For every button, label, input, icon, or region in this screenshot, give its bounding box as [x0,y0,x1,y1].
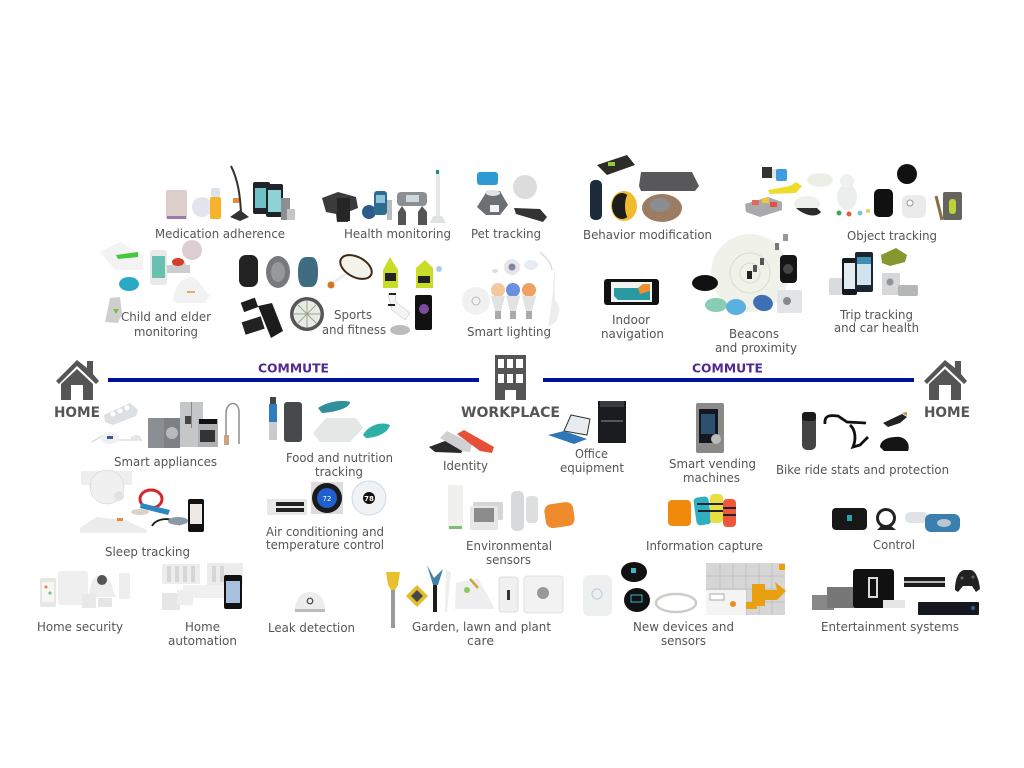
label: indoor navigation: navigation [601,326,664,341]
icon: food devices [269,397,390,442]
icon: pet devices [477,172,547,222]
heading: workplace: WORKPLACE [461,405,560,421]
label: environmental sensors: sensors [486,552,531,567]
icon: identity wristbands [429,430,494,453]
label: new devices and sensors [633,619,734,648]
label: medication adherence: Medication adherence [155,226,285,241]
label: trip tracking and car health [834,307,919,335]
panel: leak detection [268,592,355,635]
icon: sports devices [239,250,442,338]
label: entertainment systems: Entertainment systems [821,619,959,634]
label: child and elder monitoring: Child and elder [121,309,212,324]
icon: workplace building [495,355,526,400]
label: garden, lawn and plant care: Garden, lawn and plant [412,619,551,634]
icon: entertainment devices [812,569,980,615]
label: indoor navigation [601,312,664,341]
label: garden, lawn and plant care [412,619,551,648]
label: leak detection: Leak detection [268,620,355,635]
label: home automation: automation [168,633,237,648]
icon: car devices [829,248,918,296]
heading: commute left: COMMUTE [258,360,329,376]
panel: smart lighting [462,252,559,339]
icon: bike devices [802,412,909,451]
label: office equipment: Office [575,446,608,461]
label: trip tracking and car health: and car health [834,320,919,335]
label: smart appliances: Smart appliances [114,454,217,469]
icon: tracking tags [745,164,962,220]
icon: new devices and map [583,562,786,616]
heading: commute right: COMMUTE [692,360,763,376]
label: home automation: Home [185,619,220,634]
icon: capture tags [668,494,736,527]
label: child and elder monitoring: monitoring [134,324,198,339]
label: child and elder monitoring [121,309,212,339]
panel: sleep tracking [80,470,204,559]
panel: smart appliances [92,402,239,469]
panel: sports and fitness [239,250,442,338]
label: office equipment: equipment [560,460,624,475]
heading: home right: HOME [924,405,970,421]
panel: indoor navigation [601,279,664,341]
label: food and nutrition tracking: Food and nutrition [286,450,393,465]
panel: office equipment [548,401,626,475]
icon: environmental sensors [448,485,576,531]
label: bike ride stats and protection: Bike ride stats and protection [776,462,949,477]
label: environmental sensors [466,538,552,567]
icon: appliances [92,402,239,448]
label: control: Control [873,537,915,552]
panel: garden, lawn and plant care [386,565,563,648]
icon: thermostats: 78 [364,495,374,503]
panel: entertainment systems [812,569,980,634]
icon: thermostats: 72 [323,495,331,503]
icon: control devices [832,508,960,532]
icon: garden sensors [386,565,563,628]
label: new devices and sensors: sensors [661,633,706,648]
icon: home right [924,360,967,400]
icon: home left [56,360,99,400]
panel: health monitoring [322,170,451,241]
label: beacons and proximity [715,326,798,355]
panel: identity [429,430,494,473]
label: food and nutrition tracking [286,450,393,479]
icon: tablet and printer [548,401,626,444]
panel: pet tracking [471,172,547,241]
label: food and nutrition tracking: tracking [315,464,363,479]
label: health monitoring: Health monitoring [344,226,451,241]
label: trip tracking and car health: Trip tracking [839,307,913,322]
label: pet tracking: Pet tracking [471,226,541,241]
panel: environmental sensors [448,485,576,567]
icon: child and elder devices [100,240,210,323]
panel: commute route [54,355,970,421]
route line: workplace to home [543,378,914,382]
panel: air conditioning and temperature control [266,481,386,552]
label: garden, lawn and plant care: care [467,633,494,648]
icon: automation devices [162,563,243,610]
label: beacons and proximity: and proximity [715,340,798,355]
icon: leak sensor [295,592,325,612]
label: home automation [168,619,237,648]
panel: information capture [646,494,763,553]
label: office equipment [560,446,624,475]
label: sports and fitness: Sports [334,307,372,322]
icon: lighting devices [462,252,559,327]
label: air conditioning and temperature control [266,524,384,552]
label: sports and fitness [322,307,386,337]
panel: food and nutrition tracking [269,397,393,479]
icon: health devices [322,170,446,225]
label: sports and fitness: and fitness [322,322,386,337]
label: environmental sensors: Environmental [466,538,552,553]
panel: smart vending machines [669,403,756,485]
panel: home automation [162,563,243,648]
label: smart vending machines: machines [683,470,740,485]
icon: phone with indoor map [604,279,659,305]
label: object tracking: Object tracking [847,228,937,243]
label: information capture: Information capture [646,538,763,553]
panel: bike ride stats and protection [776,412,949,477]
icon: security devices [40,571,130,608]
icon: medication devices [166,166,295,221]
icon: thermostats [267,481,386,515]
label: air conditioning and temperature control: Air conditioning and [266,524,384,539]
panel: control [832,508,960,552]
label: behavior modification: Behavior modification [583,227,712,242]
route line: home to workplace [108,378,479,382]
icon: vending machine [696,403,724,453]
panel: child and elder monitoring [100,240,212,339]
label: beacons and proximity: Beacons [729,326,779,341]
icon: beacon proximity rings [692,234,802,315]
panel: behavior modification [583,155,712,242]
label: smart vending machines: Smart vending [669,456,756,471]
label: air conditioning and temperature control: temperature control [266,537,384,552]
panel: new devices and sensors [583,562,786,648]
panel: home security [37,571,130,634]
label: home security: Home security [37,619,124,634]
label: smart vending machines [669,456,756,485]
label: identity: Identity [443,458,489,473]
panel: object tracking [745,164,962,243]
icon: sleep devices [80,470,204,533]
panel: trip tracking and car health [829,248,919,335]
panel: beacons and proximity [692,234,802,355]
label: sleep tracking: Sleep tracking [105,544,190,559]
heading: home left: HOME [54,405,100,421]
label: indoor navigation: Indoor [612,312,651,327]
label: new devices and sensors: New devices and [633,619,734,634]
panel: medication adherence [155,166,295,241]
label: smart lighting: Smart lighting [467,324,551,339]
icon: behavior devices [590,155,699,222]
